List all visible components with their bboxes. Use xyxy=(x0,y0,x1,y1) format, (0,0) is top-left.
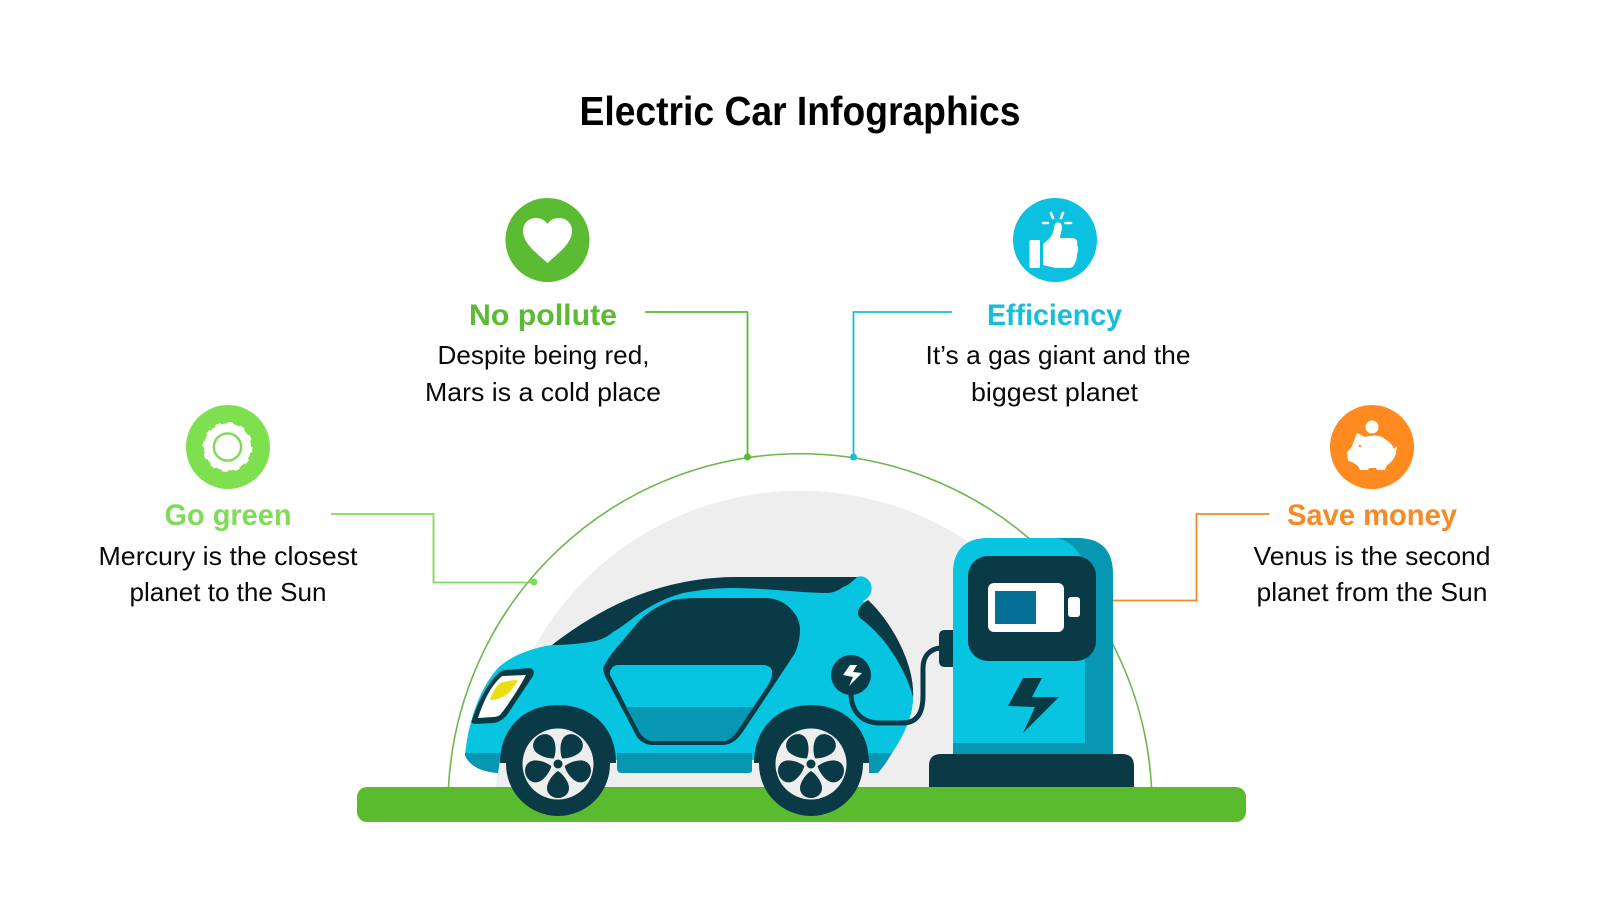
headlight xyxy=(472,668,534,724)
station body xyxy=(953,538,1113,754)
rear panel xyxy=(858,600,913,697)
text: save money description: planet from the Sun xyxy=(1256,577,1488,607)
window frame xyxy=(603,598,800,745)
heading: no pollute: No pollute xyxy=(469,299,617,332)
text: no pollute description xyxy=(425,340,661,407)
icon: thumbs up xyxy=(1013,198,1097,282)
car lower band xyxy=(465,753,892,773)
text: efficiency description: It’s a gas giant and the xyxy=(926,340,1190,370)
icon: gear xyxy=(186,405,270,489)
panel: no pollute xyxy=(425,198,751,460)
icon: piggy bank xyxy=(1330,405,1414,489)
grey backdrop circle xyxy=(496,491,1104,787)
door panel xyxy=(610,665,772,741)
roof strip xyxy=(552,577,857,645)
connector: no pollute xyxy=(645,312,751,460)
heading: save money: Save money xyxy=(1287,499,1457,532)
panel: save money xyxy=(1113,405,1490,607)
connector: go green xyxy=(331,514,538,586)
station front panel xyxy=(953,538,1085,743)
text: save money description: Venus is the second xyxy=(1254,541,1490,571)
text: go green description: planet to the Sun xyxy=(130,577,326,607)
front wheel xyxy=(500,705,616,816)
text: no pollute description: Despite being red, xyxy=(438,340,650,370)
connector: efficiency xyxy=(850,312,952,460)
dome arc xyxy=(448,454,1152,787)
rear wheel xyxy=(754,705,869,816)
title: Electric Car Infographics xyxy=(580,88,1020,134)
station screen xyxy=(968,556,1096,661)
panel: efficiency xyxy=(850,198,1190,460)
heading: efficiency: Efficiency xyxy=(987,299,1122,332)
car body xyxy=(465,576,913,773)
station lightning bolt xyxy=(1008,678,1059,733)
text: efficiency description: biggest planet xyxy=(971,377,1139,407)
charging cable xyxy=(851,648,940,723)
panel: go green xyxy=(98,405,538,607)
charging station xyxy=(929,538,1134,787)
text: go green description xyxy=(98,541,358,607)
door lower shade xyxy=(626,707,753,741)
icon: heart xyxy=(506,198,590,282)
station base xyxy=(929,754,1134,787)
text: go green description: Mercury is the closest xyxy=(98,541,358,571)
electric car xyxy=(465,576,940,816)
connector: save money xyxy=(1113,514,1270,600)
text: efficiency description xyxy=(926,340,1190,407)
text: no pollute description: Mars is a cold place xyxy=(425,377,661,407)
charging port xyxy=(831,655,871,695)
battery icon xyxy=(988,583,1080,632)
text: save money description xyxy=(1254,541,1490,607)
plug socket xyxy=(939,630,953,667)
ground bar xyxy=(357,787,1246,822)
heading: go green: Go green xyxy=(164,499,292,532)
